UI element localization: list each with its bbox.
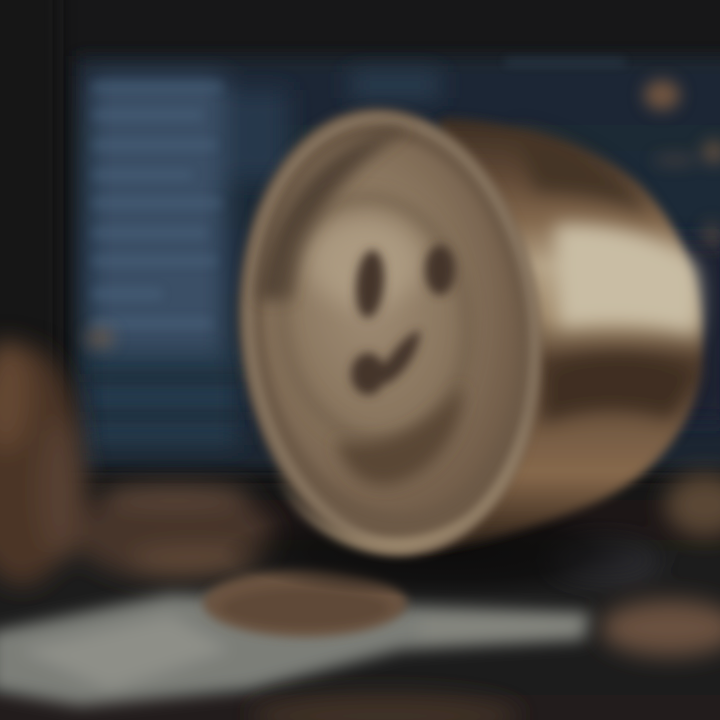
coin pile: left bbox=[0, 340, 275, 585]
coin face: inner groove bbox=[267, 186, 483, 454]
coin face: outer rim bbox=[217, 94, 563, 570]
coin face: rim highlight bbox=[228, 104, 556, 560]
coin face: lower crescent bbox=[335, 385, 463, 485]
coin edge: cylinder side bbox=[420, 118, 703, 552]
coin: large bronze coin bbox=[217, 94, 703, 570]
screen orange data marks bbox=[86, 80, 720, 348]
coin face: inner disc bbox=[245, 125, 535, 525]
coin shadow bbox=[220, 506, 680, 598]
coin pile: right bbox=[550, 473, 720, 656]
screen lower waves bbox=[85, 372, 245, 422]
table surface bbox=[0, 478, 720, 720]
paper notes on table bbox=[0, 594, 590, 706]
coin face: bottom bright rim bbox=[275, 410, 530, 553]
coin face: emblem marks bbox=[351, 245, 455, 395]
screen text lines bbox=[92, 58, 625, 328]
coin face: top shaded rim bbox=[258, 128, 410, 300]
flat coin on paper bbox=[203, 569, 407, 637]
table reflection bbox=[250, 694, 520, 720]
screen text block: left column bbox=[88, 72, 720, 445]
panel: financial screen bbox=[76, 56, 720, 471]
left dark bezel bbox=[0, 0, 58, 480]
coin face: emblem highlight bbox=[307, 217, 423, 307]
